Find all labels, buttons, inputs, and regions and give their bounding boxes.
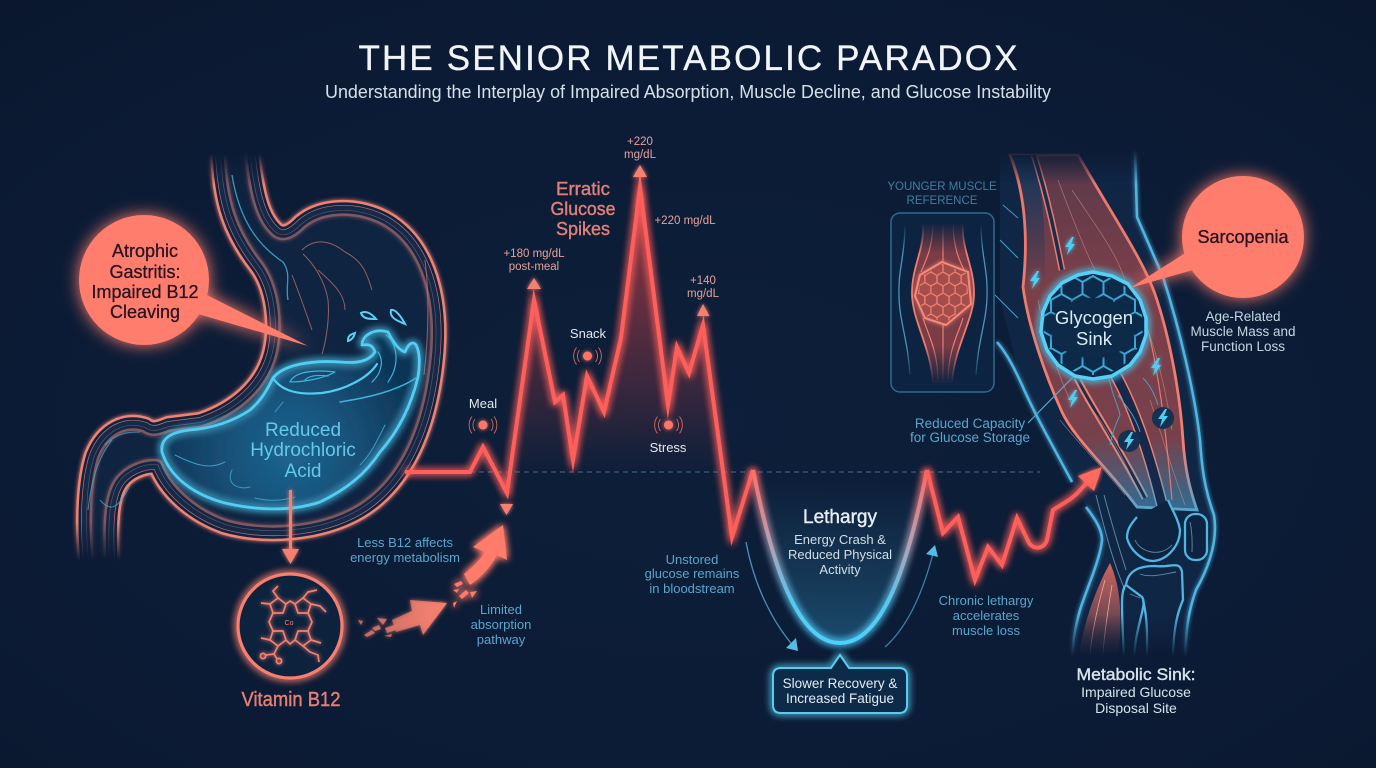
stomach inner detail lines [292, 242, 428, 375]
duodenum blue lines [88, 432, 140, 510]
event: stress: Stress [650, 440, 687, 455]
spike markers [527, 165, 710, 316]
label: +140 [687, 275, 720, 300]
spike line [405, 187, 753, 537]
callout: slower recovery: Increased Fatigue [786, 691, 894, 706]
arrowhead [1078, 467, 1102, 491]
upper left strip [1012, 155, 1045, 287]
reference label: YOUNGER MUSCLE [887, 181, 997, 193]
chart: glucose curve [405, 187, 1102, 643]
text: unstored glucose: Unstored [666, 552, 718, 567]
text: reduced capacity: for Glucose Storage [910, 430, 1030, 445]
baseline [470, 471, 1040, 473]
callout: sarcopenia: Sarcopenia [1197, 227, 1290, 247]
callout: sarcopenia [1130, 176, 1304, 298]
reference label: REFERENCE [907, 195, 978, 207]
event: meal [469, 396, 497, 434]
label: +180 [503, 248, 565, 273]
label: reduced hydrochloric acid [250, 420, 356, 482]
label: reduced hydrochloric acid: Acid [285, 461, 321, 482]
text: energy crash: Activity [819, 562, 861, 577]
text: energy crash: Energy Crash & [794, 532, 886, 547]
text: age-related: Function Loss [1201, 339, 1285, 354]
text: limited absorption: absorption [471, 617, 531, 632]
text: energy crash [788, 532, 892, 577]
label: metabolic sink: Metabolic Sink: [1076, 665, 1196, 684]
text: limited absorption: Limited [480, 602, 522, 617]
heading: lethargy: Lethargy [803, 507, 877, 528]
label: metabolic sink: Disposal Site [1095, 700, 1177, 716]
label: metabolic sink: Impaired Glucose [1081, 684, 1191, 700]
label: reduced hydrochloric acid: Reduced [265, 420, 341, 441]
label: +220 top [624, 136, 657, 161]
icon: glycogen sink: Glycogen [1055, 307, 1133, 328]
event: meal: Meal [469, 396, 497, 411]
stomach wall lines [84, 148, 439, 562]
text: chronic lethargy: Chronic lethargy [939, 593, 1034, 608]
icon: glycogen sink [1041, 272, 1146, 379]
recovery line with arrow [927, 470, 1096, 580]
label: +180: post-meal [509, 261, 559, 273]
label: +220 top: +220 [627, 136, 653, 148]
area under spikes [470, 187, 725, 493]
leg background [1000, 150, 1215, 660]
reference frame [891, 213, 994, 392]
callout text: Cleaving [110, 302, 180, 322]
event: stress [650, 416, 687, 455]
calf fibres [1090, 580, 1112, 655]
text: limited absorption: pathway [477, 632, 526, 647]
muscle dividers [1034, 155, 1172, 505]
callout text: Atrophic [112, 241, 178, 261]
icon: vitamin B12 molecule: Co [285, 620, 294, 627]
leader: reduced capacity [1028, 377, 1073, 423]
subtitle: Understanding the Interplay of Impaired Absorption, Muscle Decline, and Glucose Instability [325, 82, 1051, 102]
label: +180: +180 mg/dL [503, 248, 565, 260]
stomach body overlay [84, 148, 439, 562]
arrow: stomach to B12 [282, 490, 299, 564]
text: chronic lethargy [939, 593, 1034, 638]
text: less B12 [350, 535, 460, 565]
knee inner details [1130, 522, 1192, 598]
panel: leg muscle [995, 150, 1215, 660]
reference label [887, 181, 997, 207]
text: age-related: Age-Related [1205, 309, 1281, 324]
text: less B12: energy metabolism [350, 550, 460, 565]
callout: slower recovery [773, 655, 907, 713]
label: +220 side: +220 mg/dL [654, 215, 716, 227]
calf muscle [1080, 563, 1120, 650]
callout: slower recovery: Slower Recovery & [783, 676, 897, 691]
callout: atrophic gastritis [79, 215, 308, 346]
event: snack: Snack [570, 326, 607, 341]
muscle mass [1010, 155, 1197, 510]
label: metabolic sink [1076, 665, 1196, 716]
text: energy crash: Reduced Physical [788, 547, 892, 562]
text: age-related: Muscle Mass and [1190, 324, 1296, 339]
crash curve [753, 470, 927, 643]
bolt badges [1118, 407, 1174, 452]
callout text: Impaired B12 [91, 282, 199, 302]
text: reduced capacity [910, 416, 1030, 445]
esophagus blue line [232, 175, 288, 300]
title: THE SENIOR METABOLIC PARADOX [358, 39, 1018, 78]
text: chronic lethargy: accelerates [953, 608, 1020, 623]
label: +140: mg/dL [687, 288, 720, 300]
tendon lines [1096, 495, 1126, 590]
arrow: broken pathway to glucose [453, 525, 507, 608]
icon: vitamin B12 molecule [238, 574, 342, 678]
text: age-related [1190, 309, 1296, 354]
lethargy basin fill [753, 470, 927, 643]
label: reduced hydrochloric acid: Hydrochloric [250, 440, 356, 461]
text: less B12: Less B12 affects [357, 535, 453, 550]
reference muscle [899, 222, 987, 382]
panel: younger muscle reference [887, 181, 997, 392]
icon: glycogen sink: Sink [1076, 328, 1113, 349]
arrow: into crash [746, 542, 798, 651]
panel: stomach [84, 148, 439, 562]
label: vitamin B12: Vitamin B12 [242, 689, 340, 711]
text: unstored glucose: in bloodstream [649, 581, 735, 596]
heading: erratic glucose spikes: Erratic [556, 179, 610, 199]
muscle fibres [1038, 180, 1185, 505]
event: snack [570, 326, 607, 364]
nerves and side strokes [995, 205, 1158, 445]
text: limited absorption [471, 602, 531, 647]
leg outline [997, 150, 1215, 660]
text: reduced capacity: Reduced Capacity [915, 416, 1025, 431]
text: unstored glucose [645, 552, 740, 596]
text: chronic lethargy: muscle loss [952, 623, 1020, 638]
pointer and bubble [79, 215, 308, 346]
arrow: out of crash [885, 545, 938, 647]
text: unstored glucose: glucose remains [645, 566, 740, 581]
heading: erratic glucose spikes: Glucose [550, 199, 616, 219]
callout text [91, 241, 199, 322]
water droplets [348, 310, 405, 341]
reference hexagon [915, 262, 971, 325]
energy bolts [1030, 237, 1161, 408]
label: +220 top: mg/dL [624, 149, 657, 161]
marker: dip triangle [500, 504, 513, 515]
knee joint [1122, 500, 1207, 660]
arrow: limited absorption particles [358, 600, 447, 637]
acid fluid [162, 331, 419, 509]
heading: erratic glucose spikes [550, 179, 616, 239]
heading: erratic glucose spikes: Spikes [556, 219, 610, 239]
callout text: Gastritis: [109, 262, 181, 282]
label: +140: +140 [690, 275, 716, 287]
